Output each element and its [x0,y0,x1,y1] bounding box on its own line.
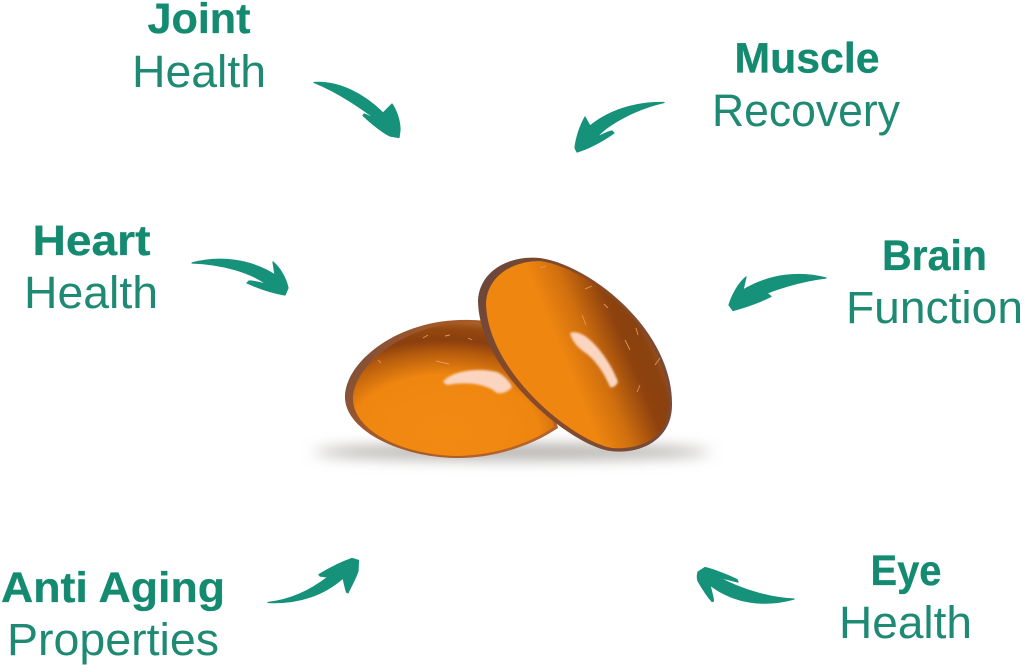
subheading: Properties: Properties [7,614,219,665]
arrow: Muscle Recovery [575,102,664,152]
arrow: Brain Function [729,274,826,310]
subheading: Health: Health [24,267,158,318]
surface specks [378,266,660,392]
heading: Heart: Heart [32,217,150,265]
heading: Muscle: Muscle [734,34,880,82]
label: Muscle Recovery [712,34,900,136]
highlight [570,332,618,387]
highlight [443,370,512,393]
subheading: Recovery: Recovery [712,85,900,136]
heading: Anti Aging: Anti Aging [1,564,225,612]
heading: Eye: Eye [870,547,942,595]
arrow: Joint Health [314,82,400,138]
subheading: Health: Health [839,597,972,648]
ground shadow [314,444,710,460]
label: Brain Function [846,232,1023,333]
arrow: Eye Health [697,568,794,603]
label: Joint Health [132,0,266,97]
arrow: Heart Health [192,259,288,295]
softgel capsules with shadow [314,258,710,460]
label: Eye Health [839,547,972,648]
heading: Brain: Brain [882,232,987,280]
label: Heart Health [24,217,158,318]
subheading: Function: Function [846,282,1023,333]
subheading: Health: Health [132,46,266,97]
capsule: lying softgel [345,320,558,458]
label: Anti Aging Properties [1,564,225,665]
capsule: leaning softgel [478,258,672,452]
arrow: Anti Aging Properties [268,558,358,603]
